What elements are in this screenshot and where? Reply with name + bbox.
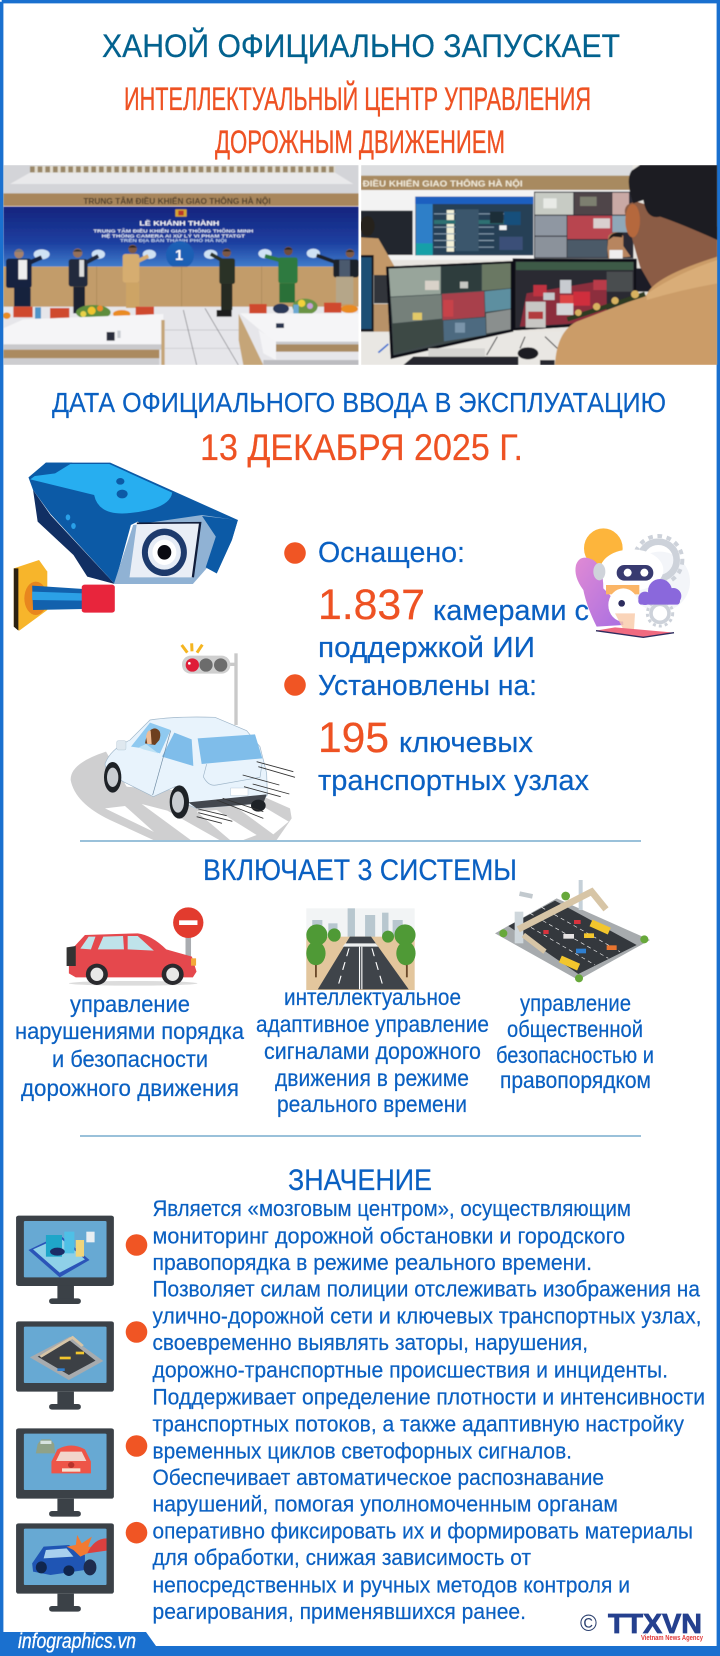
date heading: 13 ДЕКАБРЯ 2025 Г. — [200, 427, 523, 468]
photo: opening ceremony: TRUNG TÂM ĐIỀU KHIỂN GIAO THÔNG HÀ NỘI — [83, 196, 271, 206]
text: system 1 — [15, 991, 244, 1101]
photo: opening ceremony: 1 — [175, 248, 183, 264]
photo: opening ceremony: LỄ KHÁNH THÀNH — [139, 221, 219, 228]
tables — [3, 313, 359, 365]
significance body text: нарушений, помогая уполномоченным органам — [152, 1492, 618, 1517]
text: system 3 — [496, 990, 654, 1093]
significance body text: реагирования, применявшихся ранее. — [152, 1599, 526, 1624]
monitor icon 1: smart city — [16, 1216, 114, 1304]
monitor icon 2: highway — [16, 1321, 114, 1410]
text: equipped: Оснащено: — [318, 537, 465, 569]
text: system 2: адаптивное управление — [256, 1011, 489, 1037]
photo: opening ceremony: TRÊN ĐỊA BÀN THÀNH PHỐ HÀ NỘI — [120, 238, 227, 243]
title: ДОРОЖНЫМ ДВИЖЕНИЕМ — [215, 124, 505, 160]
significance body text: Обеспечивает автоматическое распознавание — [152, 1465, 604, 1490]
footer bar — [0, 1630, 720, 1656]
people — [6, 245, 359, 317]
officer — [555, 165, 717, 365]
text: system 2 — [256, 984, 489, 1117]
small monitor — [361, 255, 374, 332]
flowers and name cards — [3, 299, 358, 320]
significance body text: для обработки, снижая зависимость от — [152, 1545, 531, 1570]
text: system 1: дорожного движения — [21, 1075, 239, 1101]
text: installed — [318, 670, 589, 797]
text: equipped — [318, 537, 589, 664]
text: equipped: поддержкой ИИ — [318, 632, 535, 664]
text: installed: транспортных узлах — [318, 765, 589, 797]
icon: traffic light — [182, 643, 238, 725]
person near wall — [607, 232, 631, 259]
significance body text: непосредственных и ручных методов контроля и — [152, 1572, 630, 1597]
logo: TTXVN: TTXVN — [608, 1608, 702, 1639]
significance body text: Является «мозговым центром», осуществляющим — [152, 1196, 631, 1221]
heading: 3 systems: ВКЛЮЧАЕТ 3 СИСТЕМЫ — [203, 854, 517, 887]
photo: opening ceremony: TRUNG TÂM ĐIỀU KHIỂN GIAO THÔNG THÔNG MINH — [93, 228, 253, 233]
date heading: ДАТА ОФИЦИАЛЬНОГО ВВОДА В ЭКСПЛУАТАЦИЮ — [52, 387, 666, 418]
text: system 3: безопасностью и — [496, 1042, 654, 1068]
photo: traffic control room — [360, 165, 717, 365]
significance body text — [152, 1196, 705, 1624]
text: equipped: камерами с — [433, 595, 589, 627]
icon: AI robot — [575, 528, 690, 637]
text: system 1: нарушениями порядка — [15, 1018, 244, 1044]
desk items — [378, 337, 557, 365]
text: system 2: движения в режиме — [275, 1065, 469, 1091]
heading: significance: ЗНАЧЕНИЕ — [288, 1164, 432, 1197]
icon: red car with no-entry sign — [67, 907, 203, 986]
bullets: significance — [126, 1234, 147, 1543]
photo: opening ceremony: HỆ THỐNG CAMERA AI XỬ LÝ VI PHẠM TTATGT — [102, 233, 246, 238]
text: installed: Установлены на: — [318, 670, 537, 702]
logo: TTXVN — [580, 1608, 703, 1642]
title: ХАНОЙ ОФИЦИАЛЬНО ЗАПУСКАЕТ — [102, 28, 620, 64]
photo: opening ceremony — [3, 165, 359, 365]
icon: white car — [71, 717, 295, 840]
text: installed: 195 — [318, 714, 389, 762]
text: system 1: и безопасности — [52, 1046, 208, 1072]
dashboard screen — [415, 197, 533, 255]
significance body text: оперативно фиксировать их и формировать материалы — [152, 1518, 693, 1543]
logo: TTXVN: © — [580, 1610, 597, 1636]
date heading — [52, 387, 666, 468]
bullet: equipped — [284, 542, 306, 564]
text: system 3: правопорядком — [500, 1067, 651, 1093]
text: system 2: сигналами дорожного — [264, 1038, 481, 1064]
title — [102, 28, 620, 160]
significance body text: мониторинг дорожной обстановки и городского — [152, 1223, 625, 1248]
significance body text: правопорядка в режиме реального времени. — [152, 1250, 592, 1275]
icon: road with city — [306, 908, 416, 990]
text: system 2: интеллектуальное — [284, 984, 461, 1010]
text: installed: ключевых — [399, 727, 533, 759]
text: system 3: общественной — [507, 1016, 643, 1042]
footer bar: infographics.vn — [18, 1630, 136, 1653]
video wall — [534, 192, 633, 258]
significance body text: временных циклов светофорных сигналов. — [152, 1438, 572, 1463]
text: system 1: управление — [70, 991, 190, 1017]
photo: traffic control room: ĐIỀU KHIỂN GIAO THÔNG HÀ NỘI — [363, 179, 523, 189]
monitor icon 4: collision — [16, 1523, 114, 1612]
monitor icon 3: cars — [16, 1428, 114, 1517]
icon: highway with overpass — [495, 880, 650, 982]
text: equipped: 1.837 — [318, 581, 425, 629]
monitor right — [513, 258, 637, 331]
text: system 2: реального времени — [277, 1091, 467, 1117]
icon: surveillance camera — [14, 463, 238, 631]
text: system 3: управление — [520, 990, 631, 1016]
monitor left — [386, 261, 513, 359]
significance body text: дорожно-транспортные происшествия и инциденты. — [152, 1357, 668, 1382]
significance body text: своевременно выявлять заторы, нарушения, — [152, 1330, 588, 1355]
significance body text: транспортных потоков, а также адаптивную настройку — [152, 1411, 685, 1436]
bullet: installed — [284, 674, 306, 696]
logo: TTXVN: Vietnam News Agency — [641, 1635, 703, 1642]
